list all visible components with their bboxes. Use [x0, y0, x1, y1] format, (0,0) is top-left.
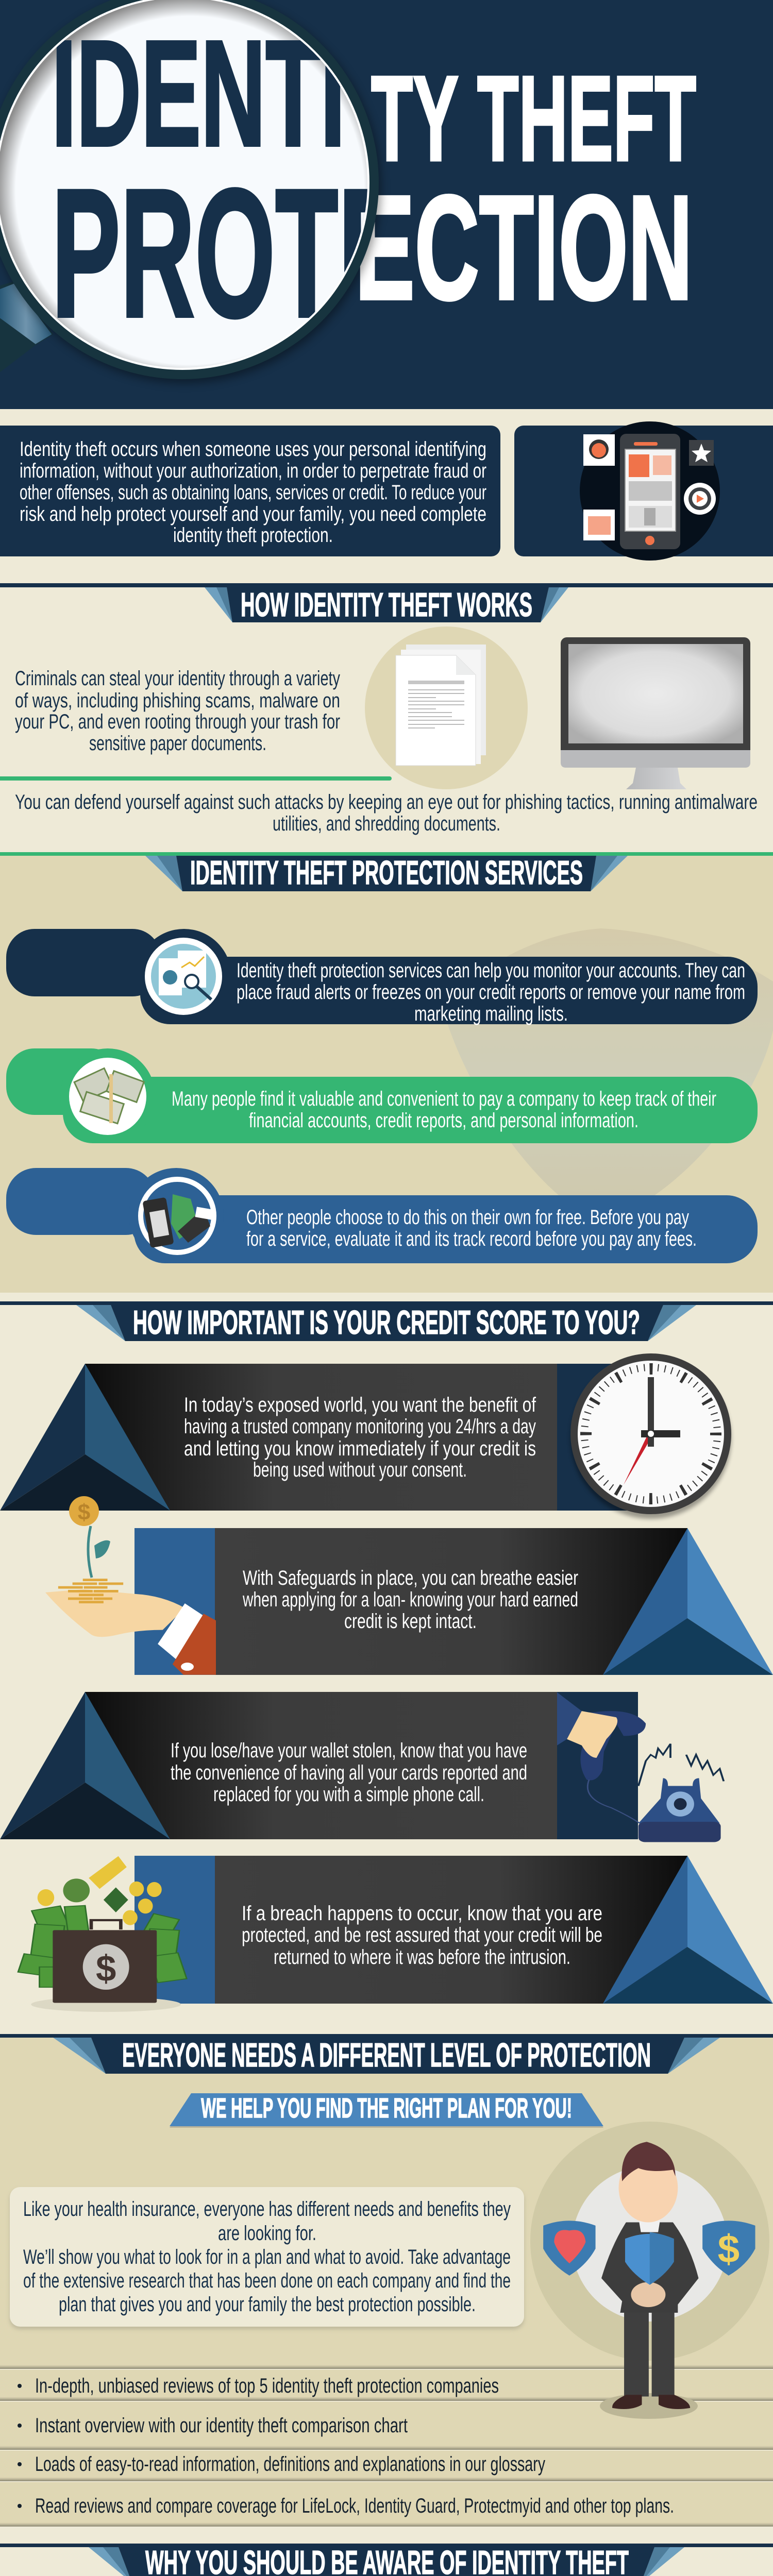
icon: magnifying glass: PROTE	[52, 151, 407, 355]
icon: briefcase with money	[18, 1856, 187, 2012]
text box: plan advice: plan that gives you and your family the best protection possible.	[59, 2293, 476, 2316]
icon: businessman with shields: $	[718, 2228, 740, 2272]
bullet list bands: In-depth, unbiased reviews of top 5 identity theft protection companies	[35, 2375, 499, 2397]
icon: magnifying glass	[0, 0, 407, 383]
panel: introduction text: Identity theft occurs when someone uses your personal identifying	[20, 438, 486, 461]
icon: magnifying glass: IDENTI	[52, 9, 345, 177]
text: how to defend yourself: utilities, and shredding documents.	[273, 812, 500, 835]
bullet list bands: Loads of easy-to-read information, definitions and explanations in our glossary	[35, 2453, 545, 2476]
service pill: pay a company	[6, 1048, 758, 1143]
text box: plan advice: of the extensive research that has been done on each company and find the	[23, 2269, 511, 2292]
card: breathe easier on a loan: With Safeguards in place, you can breathe easier	[243, 1567, 578, 1589]
card: lost wallet: If you lose/have your wallet stolen, know that you have	[171, 1739, 527, 1762]
panel: introduction text: other offenses, such as obtaining loans, services or credit. To reduce your	[20, 481, 486, 504]
bullet list bands	[0, 2365, 773, 2527]
service pill: monitor accounts	[6, 929, 758, 1025]
card: breach: returned to where it was before the intrusion.	[274, 1946, 570, 1969]
title: white text: TY	[371, 50, 459, 186]
service pill: monitor accounts: marketing mailing lists.	[414, 1003, 568, 1025]
text: how criminals steal identity	[15, 667, 340, 755]
service pill: do it yourself	[6, 1168, 758, 1263]
icon: briefcase with money: $	[96, 1948, 116, 1989]
card: breach	[18, 1856, 773, 2012]
heading: how identity theft works	[0, 583, 773, 623]
panel: introduction text: information, without your authorization, in order to perpetrate fraud or	[20, 460, 486, 482]
text: how criminals steal identity: your PC, and even rooting through your trash for	[15, 710, 340, 733]
icon: computer monitor	[561, 637, 750, 789]
icon: hand holding coins and plant: $	[78, 1500, 90, 1525]
card: breathe easier on a loan	[45, 1496, 773, 1675]
divider: green rule	[0, 776, 392, 781]
heading: how identity theft works: HOW IDENTITY THEFT WORKS	[241, 586, 532, 623]
background shield	[443, 928, 773, 1198]
panel: protection services	[0, 852, 773, 1293]
bullet list bands: Instant overview with our identity theft comparison chart	[35, 2414, 408, 2437]
panel: introduction text: risk and help protect yourself and your family, you need complete	[20, 503, 486, 526]
text: how criminals steal identity: of ways, including phishing scams, malware on	[15, 689, 340, 712]
icon: businessman with shields	[530, 2122, 769, 2419]
text box: plan advice: Like your health insurance, everyone has different needs and benefits they	[23, 2198, 511, 2221]
text box: plan advice	[10, 2187, 524, 2329]
service pill: pay a company: financial accounts, credit reports, and personal information.	[249, 1109, 638, 1132]
card: 24 hour monitoring	[0, 1353, 731, 1519]
heading: protection services	[145, 854, 628, 891]
card: 24 hour monitoring: being used without your consent.	[253, 1459, 467, 1481]
card: breach: protected, and be rest assured that your credit will be	[242, 1924, 602, 1946]
card: lost wallet: the convenience of having all your cards reported and	[171, 1761, 527, 1784]
card: breach: If a breach happens to occur, know that you are	[242, 1902, 602, 1925]
panel: introduction text	[0, 426, 500, 556]
text box: plan advice: We’ll show you what to look for in a plan and what to avoid. Take advantage	[23, 2246, 511, 2268]
icon: paper documents	[365, 626, 528, 789]
text box: plan advice: are looking for.	[218, 2222, 316, 2245]
card: breathe easier on a loan: when applying for a loan- knowing your hard earned	[242, 1588, 578, 1611]
panel: different level of protection	[0, 2034, 773, 2527]
text: how criminals steal identity: sensitive paper documents.	[89, 732, 266, 755]
text: how to defend yourself	[15, 791, 758, 835]
icon: wall clock	[570, 1353, 731, 1519]
panel: phone illustration	[514, 421, 773, 561]
card: 24 hour monitoring: having a trusted company monitoring you 24/hrs a day	[184, 1415, 536, 1438]
text: how criminals steal identity: Criminals can steal your identity through a variety	[15, 667, 340, 690]
card: breathe easier on a loan: credit is kept intact.	[344, 1610, 477, 1633]
card: lost wallet	[0, 1692, 724, 1842]
icon: hand holding coins and plant	[45, 1496, 216, 1675]
card: 24 hour monitoring: In today’s exposed world, you want the benefit of	[184, 1394, 536, 1416]
title: white text	[355, 50, 696, 331]
header panel	[0, 0, 773, 409]
panel: introduction text: identity theft protection.	[173, 524, 333, 547]
card: lost wallet: replaced for you with a simple phone call.	[213, 1783, 484, 1806]
icon: rotary telephone	[557, 1692, 724, 1842]
card: 24 hour monitoring: and letting you know immediately if your credit is	[184, 1437, 536, 1460]
subheading ribbon	[170, 2093, 603, 2128]
